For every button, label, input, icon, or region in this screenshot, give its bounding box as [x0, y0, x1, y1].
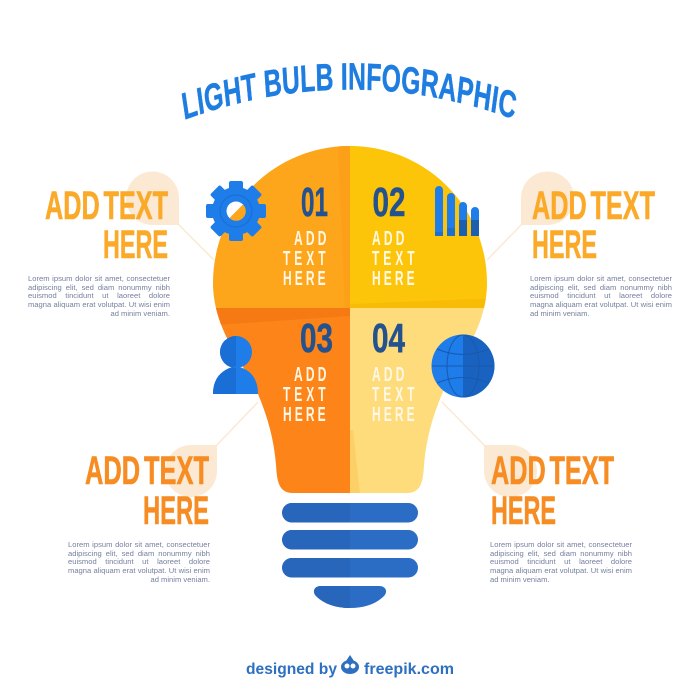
- body text: bottom right: [490, 540, 632, 584]
- quadrant 4: [350, 308, 484, 493]
- body text: bottom left: euismod tincidunt ut laoreet dolore: [68, 557, 210, 566]
- connector lines: [178, 224, 522, 446]
- label 03: TEXT: [283, 384, 326, 406]
- body text: bottom left: adipiscing elit, sed diam nonummy nibh: [68, 549, 210, 558]
- body text: top left: magna aliquam erat volutpat. Ut wisi enim: [28, 300, 170, 309]
- label 03: ADD: [294, 364, 326, 386]
- icon: globe: [432, 334, 495, 398]
- label 04: ADD: [372, 364, 404, 386]
- label 01: ADD: [294, 228, 326, 250]
- body text: top left: [28, 274, 170, 318]
- icon: bar chart: [435, 186, 479, 236]
- body text: top left: euismod tincidunt ut laoreet dolore: [28, 291, 170, 300]
- body text: top left: Lorem ipsum dolor sit amet, consectetuer: [28, 274, 170, 283]
- heading: top right: [532, 184, 655, 267]
- label 01: HERE: [283, 268, 326, 290]
- label 02: HERE: [372, 268, 415, 290]
- callout shape: top left: [126, 172, 179, 225]
- label 04: [372, 364, 415, 426]
- body text: bottom right: euismod tincidunt ut laoreet dolore: [490, 557, 632, 566]
- body text: bottom left: Lorem ipsum dolor sit amet, consectetuer: [68, 540, 210, 549]
- heading: bottom left: [85, 449, 209, 533]
- footer credit: freepik.com: [364, 661, 454, 678]
- callout shape: bottom right: [484, 445, 537, 497]
- number 01: 01: [301, 179, 328, 225]
- body text: top right: [530, 274, 672, 318]
- body text: bottom right: ad minim veniam.: [490, 575, 550, 584]
- heading: bottom right: HERE: [491, 489, 556, 533]
- label 03: [283, 364, 326, 426]
- body text: top right: magna aliquam erat volutpat. Ut wisi enim: [530, 300, 672, 309]
- body text: bottom left: magna aliquam erat volutpat. Ut wisi enim: [68, 566, 210, 575]
- quadrant 3: [216, 308, 350, 493]
- number 03: 03: [300, 315, 333, 361]
- light bulb: [213, 146, 487, 493]
- body text: top left: ad minim veniam.: [110, 309, 170, 318]
- body text: bottom left: [68, 540, 210, 584]
- body text: bottom left: ad minim veniam.: [150, 575, 210, 584]
- heading: bottom right: ADD TEXT: [491, 449, 614, 493]
- label 01: [283, 228, 326, 290]
- label 02: TEXT: [372, 248, 415, 270]
- heading: top left: [45, 184, 168, 267]
- heading: bottom right: [491, 449, 614, 533]
- callout shape: top right: [521, 172, 574, 225]
- label 04: HERE: [372, 404, 415, 426]
- body text: top right: adipiscing elit, sed diam nonummy nibh: [530, 283, 672, 292]
- quadrant 2: [350, 146, 487, 308]
- heading: top left: HERE: [103, 223, 168, 267]
- body text: top right: Lorem ipsum dolor sit amet, consectetuer: [530, 274, 672, 283]
- quadrant 1: [213, 146, 350, 308]
- number 02: 02: [372, 179, 406, 225]
- label 01: TEXT: [283, 248, 326, 270]
- body text: bottom right: magna aliquam erat volutpat. Ut wisi enim: [490, 566, 632, 575]
- title: LIGHT BULB INFOGRAPHIC: [182, 63, 516, 120]
- icon: freepik mascot: [341, 655, 359, 674]
- body text: top right: euismod tincidunt ut laoreet dolore: [530, 291, 672, 300]
- footer credit: [246, 655, 454, 678]
- body text: bottom right: Lorem ipsum dolor sit amet, consectetuer: [490, 540, 632, 549]
- label 03: HERE: [283, 404, 326, 426]
- icon: gear: [206, 181, 266, 241]
- label 02: [372, 228, 415, 290]
- bulb base: [282, 503, 418, 608]
- heading: bottom left: HERE: [143, 489, 209, 533]
- body text: top left: adipiscing elit, sed diam nonummy nibh: [28, 283, 170, 292]
- body text: bottom right: adipiscing elit, sed diam nonummy nibh: [490, 549, 632, 558]
- heading: top left: ADD TEXT: [45, 184, 168, 228]
- label 04: TEXT: [372, 384, 415, 406]
- body text: top right: ad minim veniam.: [530, 309, 590, 318]
- callout shape: bottom left: [165, 445, 217, 497]
- heading: bottom left: ADD TEXT: [85, 449, 209, 493]
- number 04: 04: [372, 315, 405, 361]
- icon: person: [213, 336, 258, 394]
- footer credit: designed by: [246, 661, 337, 678]
- label 02: ADD: [372, 228, 404, 250]
- heading: top right: HERE: [532, 223, 597, 267]
